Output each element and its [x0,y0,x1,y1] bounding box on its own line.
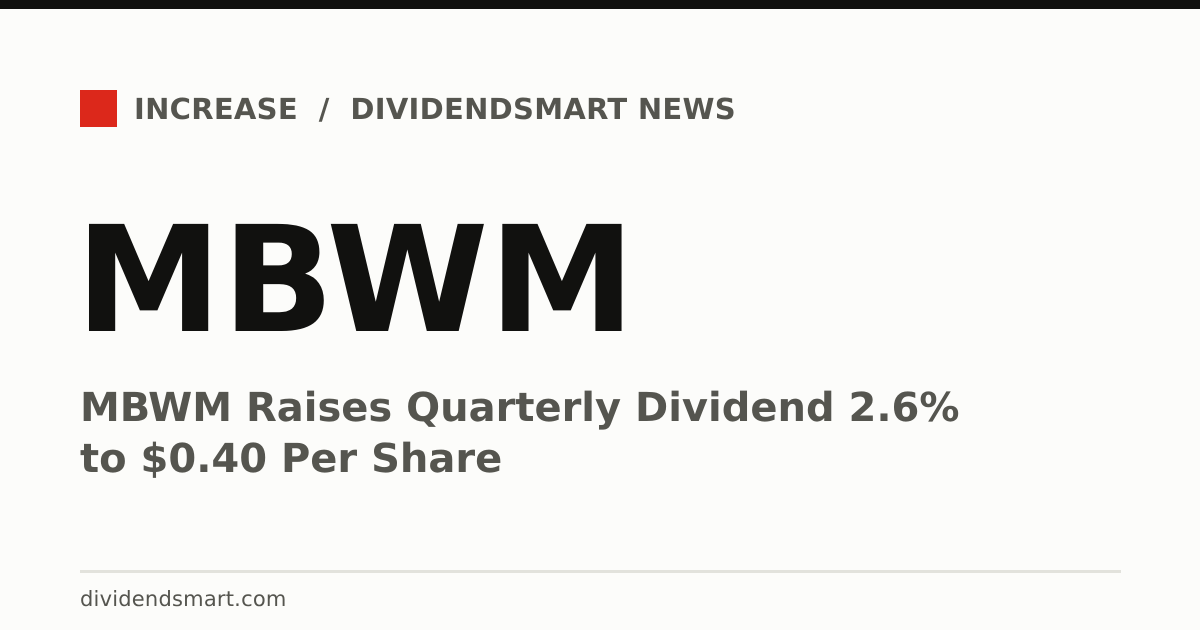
ticker title: MBWM [76,195,635,366]
footer site name: dividendsmart.com [80,587,287,611]
top bar [0,0,1200,9]
headline: MBWM Raises Quarterly Dividend 2.6% [80,385,959,431]
headline [80,385,959,482]
footer rule [80,570,1121,573]
kicker label: INCREASE / DIVIDENDSMART NEWS [134,92,736,126]
red square marker [80,90,117,127]
headline: to $0.40 Per Share [80,436,502,482]
